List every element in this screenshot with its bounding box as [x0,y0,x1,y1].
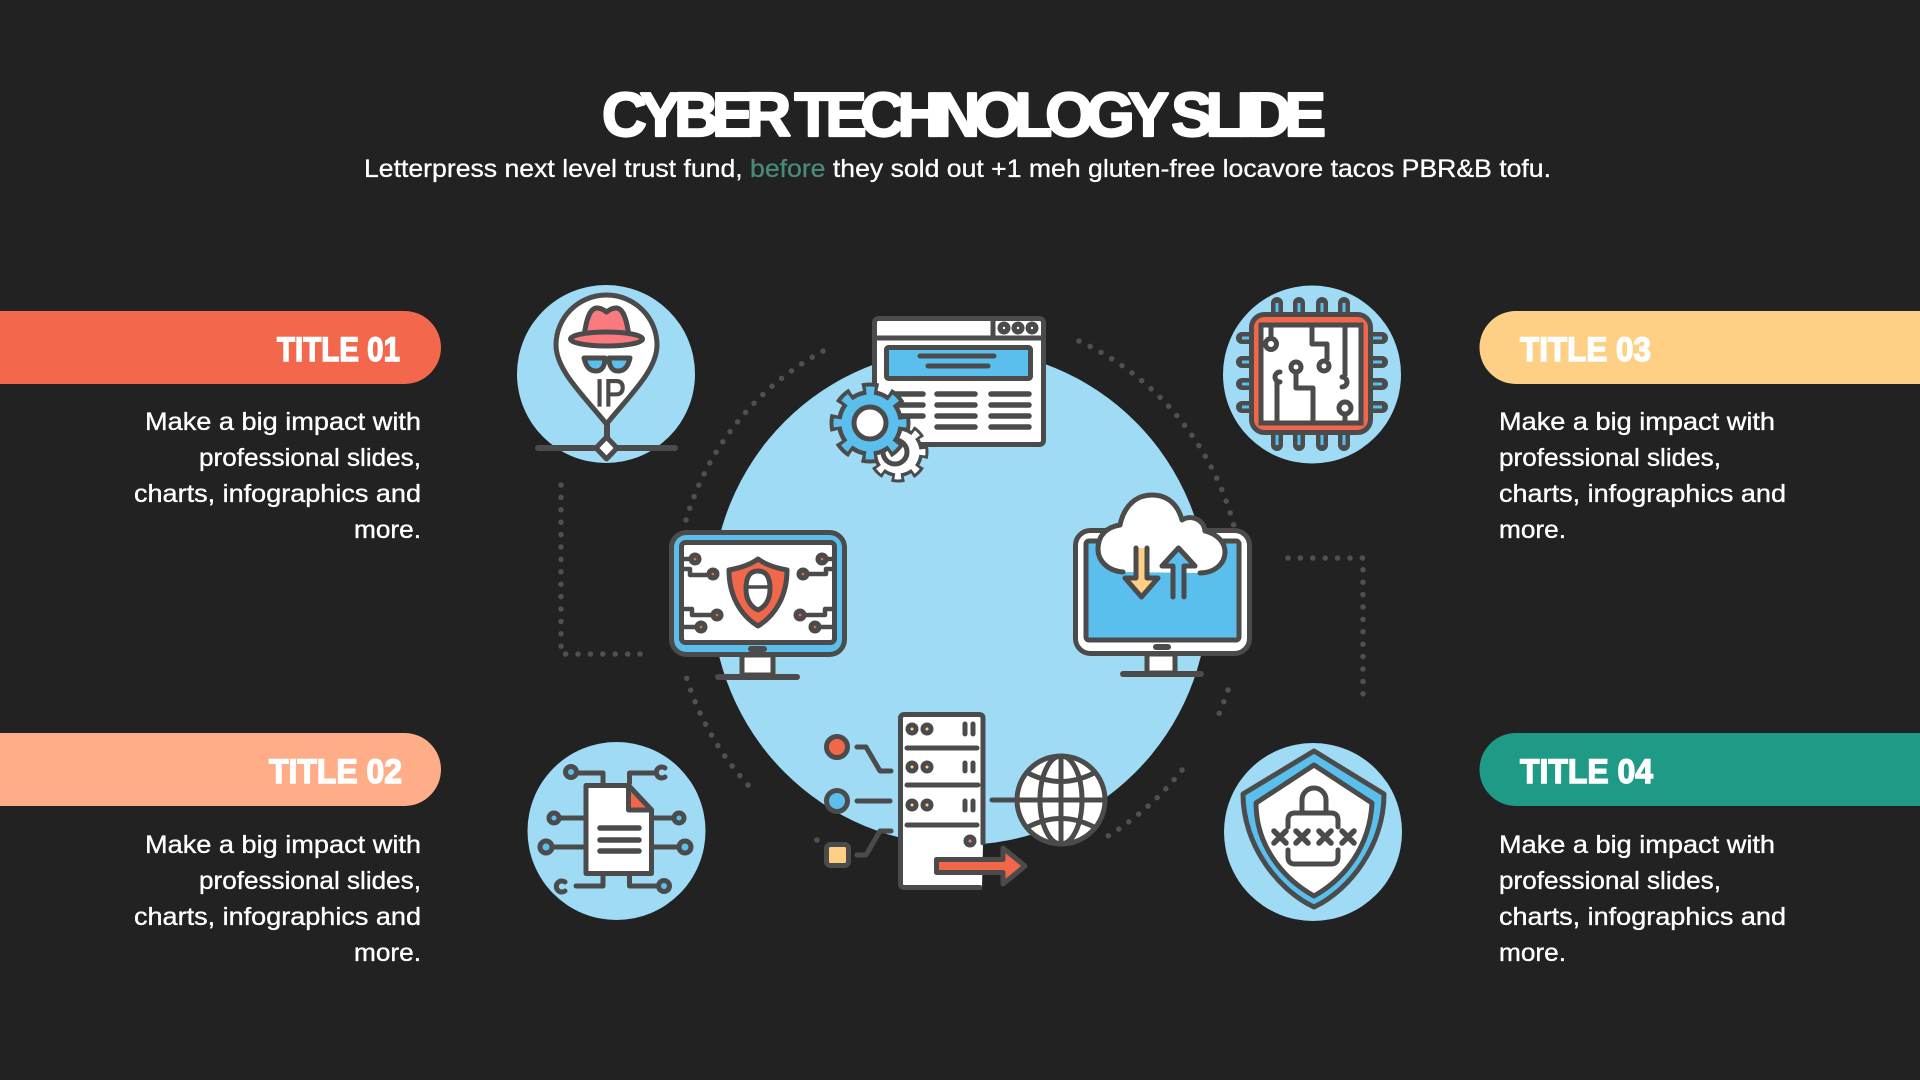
chip pins [1242,303,1382,445]
text block: title 01 description: professional slides, [199,444,421,472]
text block: title 02 description [134,831,421,967]
text block: title 03 description: professional slides, [1499,444,1721,472]
text block: title 01 description: Make a big impact with [145,408,421,436]
subtitle: Letterpress next level trust fund, before they sold out +1 meh gluten-free locavore tacos PBR&B tofu. [364,155,1551,183]
dotted connector right [1288,558,1363,696]
text block: title 01 description: charts, infographics and [134,480,421,508]
text block: title 04 description: charts, infographics and [1499,903,1786,931]
text block: title 04 description [1499,831,1786,967]
text block: title 04 description: professional slides, [1499,867,1721,895]
panel: title 01 [0,311,441,544]
server tower [900,714,983,888]
text block: title 01 description [134,408,421,544]
text block: title 03 description: more. [1499,516,1566,544]
text block: title 02 description: professional slides, [199,867,421,895]
cloud [1098,495,1225,573]
icon: incognito IP pin: IP [595,373,626,415]
panel: title 04: TITLE 04 [1520,753,1653,791]
panel: title 01: TITLE 01 [277,331,400,369]
dotted ring [686,341,1235,843]
icon: cloud monitor [1076,495,1250,674]
icon: circuit chip [1223,286,1401,464]
icon: large gear [834,387,906,459]
panel: title 03 [1479,311,1920,544]
panel: title 04 [1479,733,1920,967]
icon: incognito IP pin [517,285,695,463]
icon: password shield [1224,743,1402,921]
text block: title 02 description: charts, infographics and [134,903,421,931]
text block: title 02 description: more. [354,939,421,967]
text block: title 04 description: more. [1499,939,1566,967]
shield with lock [729,559,787,626]
text block: title 03 description [1499,408,1786,544]
arrow: download [1125,548,1158,597]
icon: document circuit [528,742,706,920]
text block: title 04 description: Make a big impact with [1499,831,1775,859]
globe [992,756,1105,844]
arrow: upload [1162,548,1195,597]
text block: title 03 description: Make a big impact with [1499,408,1775,436]
text block: title 02 description: Make a big impact with [145,831,421,859]
arrow: red [936,848,1025,884]
title: CYBER TECHNOLOGY SLIDE [602,81,1326,150]
circuit traces [681,552,836,634]
panel: title 02 [0,733,441,967]
icon: server network [826,714,1105,888]
panel: title 03: TITLE 03 [1520,331,1651,369]
text block: title 03 description: charts, infographics and [1499,480,1786,508]
text block: title 01 description: more. [354,516,421,544]
central circle [712,349,1208,845]
icon: security monitor [672,532,844,677]
panel: title 02: TITLE 02 [269,753,402,791]
connector nodes [826,736,891,866]
dotted connector left [561,485,640,654]
icon: browser window with gears [834,318,1044,478]
icon: small gear [872,426,924,478]
